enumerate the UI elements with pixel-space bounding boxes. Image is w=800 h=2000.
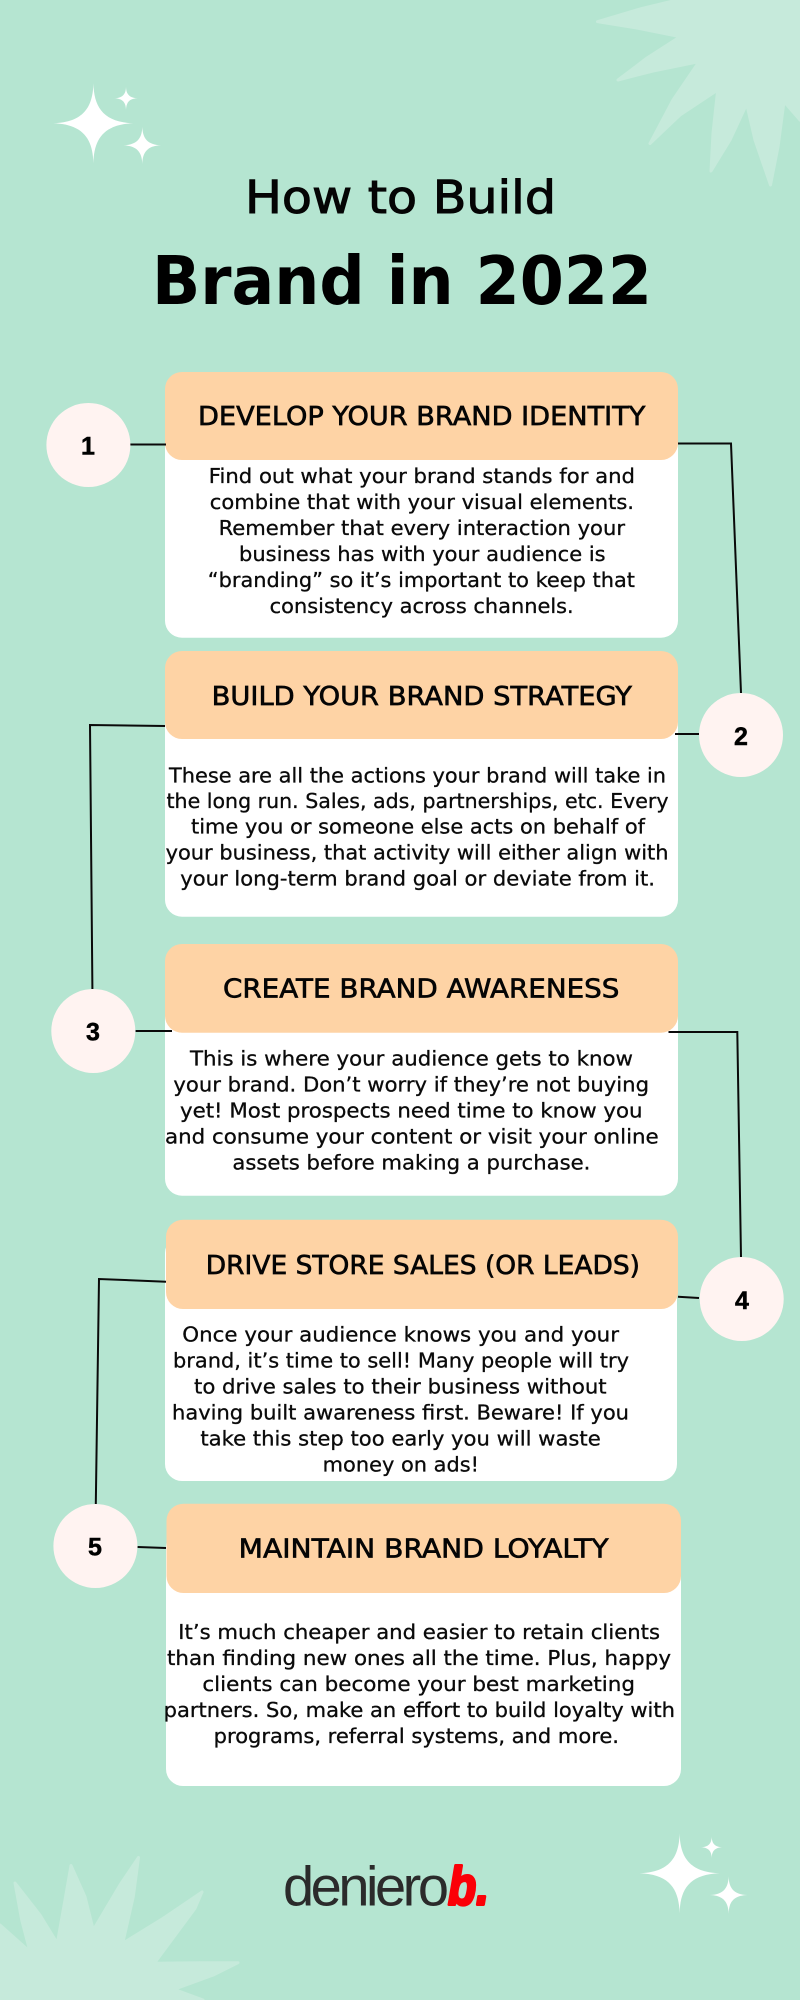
body text: Once your audience knows you and your (182, 1322, 620, 1346)
icon: sparkles top left (53, 83, 161, 164)
body text: your business, that activity will either align with (166, 841, 668, 865)
decorative burst: top right (598, 0, 800, 185)
card header (166, 1504, 681, 1593)
logo wordmark: deniero (283, 1854, 449, 1918)
body text: and consume your content or visit your online (165, 1124, 659, 1148)
connector arrows (90, 444, 741, 1548)
panel: step 1 (165, 372, 678, 638)
step number 4: 4 (735, 1287, 749, 1315)
body text: having built awareness first. Beware! If you (172, 1400, 629, 1424)
step number 1: 1 (81, 432, 95, 460)
body text (164, 1620, 675, 1748)
body text: money on ads! (323, 1452, 479, 1476)
title (152, 171, 652, 320)
step number 5: 5 (88, 1534, 102, 1562)
card header (165, 944, 678, 1033)
card header (165, 372, 678, 460)
body text: your long-term brand goal or deviate from it. (180, 867, 655, 891)
body text: These are all the actions your brand will take in (168, 763, 666, 787)
panel: step 2 (165, 651, 678, 917)
card body (165, 680, 678, 917)
body text: clients can become your best marketing (202, 1672, 635, 1696)
body text: programs, referral systems, and more. (214, 1724, 619, 1748)
card header (165, 651, 678, 739)
body text: “branding” so it’s important to keep that (208, 568, 635, 592)
icon: sparkles bottom right (640, 1833, 747, 1914)
body text: business has with your audience is (239, 542, 606, 566)
body text (166, 763, 668, 891)
body text (165, 1047, 659, 1174)
step number 1 (46, 403, 130, 487)
card body (165, 1236, 677, 1481)
body text: Find out what your brand stands for and (209, 464, 635, 488)
body text: combine that with your visual elements. (210, 490, 634, 514)
step number 3: 3 (86, 1018, 100, 1046)
card body (165, 970, 678, 1196)
step number 5 (53, 1504, 137, 1588)
step number 2: 2 (734, 723, 748, 751)
step number 4 (700, 1257, 784, 1341)
heading: BUILD YOUR BRAND STRATEGY (212, 682, 632, 712)
body text: This is where your audience gets to know (189, 1047, 633, 1071)
body text: consistency across channels. (270, 594, 574, 618)
body text: to drive sales to their business without (194, 1374, 607, 1398)
card header (166, 1220, 678, 1309)
body text: partners. So, make an effort to build loyalty with (164, 1698, 675, 1722)
body text (208, 464, 635, 618)
body text: than finding new ones all the time. Plus, happy (167, 1646, 671, 1670)
heading: MAINTAIN BRAND LOYALTY (239, 1535, 609, 1565)
body text (172, 1322, 629, 1476)
title line 1: How to Build (245, 171, 556, 224)
body text: time you or someone else acts on behalf of (191, 815, 646, 839)
panel: step 3 (165, 944, 678, 1196)
step number 2 (699, 693, 783, 777)
panel: step 4 (165, 1220, 678, 1481)
body text: assets before making a purchase. (232, 1150, 590, 1174)
body text: yet! Most prospects need time to know you (180, 1099, 642, 1123)
body text: It’s much cheaper and easier to retain clients (178, 1620, 660, 1644)
card body (165, 400, 678, 638)
panel: step 5 (164, 1504, 681, 1786)
heading: CREATE BRAND AWARENESS (223, 975, 619, 1005)
decorative burst: bottom left (0, 1858, 238, 2000)
body text: brand, it’s time to sell! Many people will try (173, 1348, 629, 1372)
logo (283, 1854, 489, 1918)
heading: DRIVE STORE SALES (OR LEADS) (206, 1251, 640, 1281)
body text: your brand. Don’t worry if they’re not buying (173, 1073, 649, 1097)
body text: Remember that every interaction your (219, 516, 626, 540)
heading: DEVELOP YOUR BRAND IDENTITY (198, 402, 646, 432)
logo red mark: b. (448, 1856, 489, 1916)
body text: take this step too early you will waste (200, 1426, 601, 1450)
body text: the long run. Sales, ads, partnerships, etc. Every (166, 789, 668, 813)
step number 3 (51, 989, 135, 1073)
title line 2: Brand in 2022 (152, 242, 652, 320)
card body (166, 1530, 681, 1786)
